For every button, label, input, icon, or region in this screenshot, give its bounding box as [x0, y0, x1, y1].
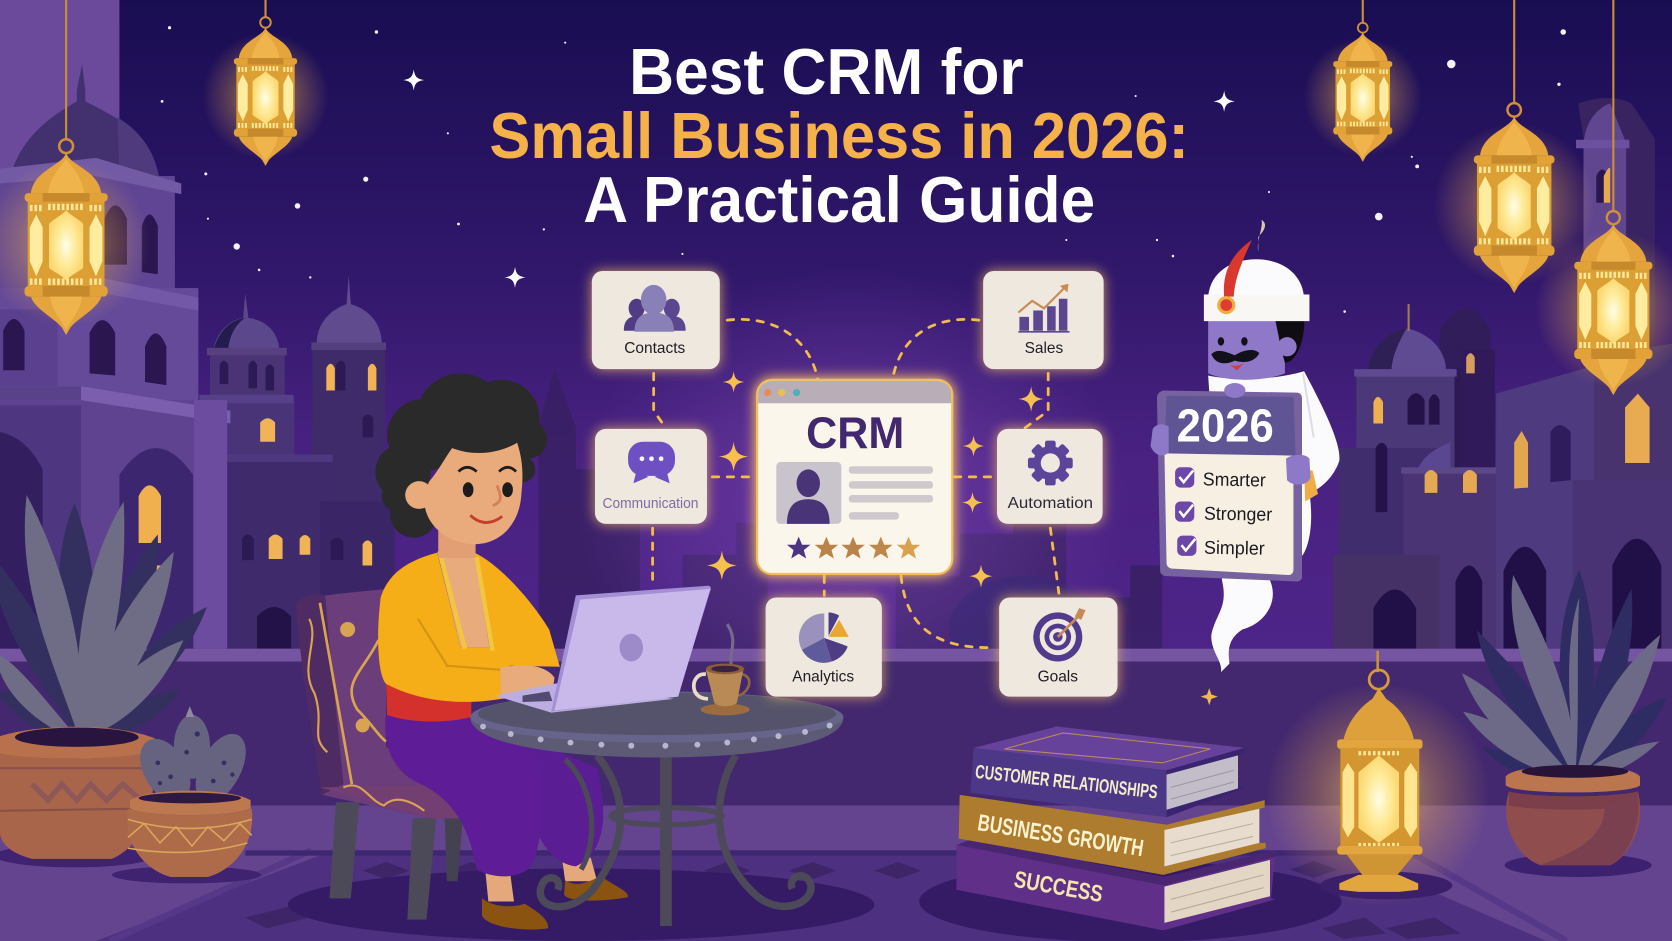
checklist: Smarter: Smarter [1203, 468, 1266, 491]
table legs [540, 753, 811, 926]
genie with 2026 sign [1151, 220, 1339, 705]
shirt [378, 553, 560, 702]
label: Sales: Sales [1025, 340, 1064, 357]
card: Automation [997, 429, 1103, 524]
icon: pie chart [799, 612, 849, 663]
book: Business Growth [959, 795, 1266, 875]
background: stars [161, 26, 1566, 313]
lantern: top left small [202, 0, 329, 166]
checklist: Smarter [1175, 467, 1266, 491]
label: Contacts: Contacts [624, 340, 685, 357]
person at laptop [296, 373, 628, 930]
lantern: floor [1266, 651, 1490, 907]
terrace wall and floor [0, 649, 1672, 941]
genie hands [1151, 383, 1311, 485]
spine label: CUSTOMER RELATIONSHIPS: CUSTOMER RELATIONSHIPS [974, 762, 1159, 804]
potted cactus [112, 706, 261, 883]
hands [500, 665, 554, 699]
checklist: Simpler [1177, 536, 1265, 559]
patterned rug [96, 850, 1566, 941]
background: night sky [0, 0, 1672, 661]
neck [438, 528, 476, 558]
laptop [495, 586, 711, 713]
checklist: Stronger [1175, 501, 1272, 525]
lantern: top right small [1304, 0, 1422, 162]
spine label: SUCCESS: SUCCESS [1012, 866, 1105, 907]
card: Contacts [592, 271, 720, 369]
card: Communication [595, 429, 707, 524]
chair [296, 589, 463, 920]
spine label: BUSINESS GROWTH: BUSINESS GROWTH [976, 809, 1145, 861]
card: Sales [983, 271, 1104, 369]
potted plant: left [0, 495, 207, 867]
heading: CRM: CRM [806, 408, 904, 458]
title: Small Business in 2026: [489, 99, 1189, 172]
profile photo [776, 462, 841, 524]
trousers [385, 715, 541, 876]
sign board [1157, 390, 1302, 581]
profile text lines [849, 466, 933, 520]
book: Success [956, 840, 1275, 930]
potted plant: right [1462, 570, 1667, 877]
background: right palace [1333, 98, 1672, 651]
background: left palace [0, 0, 395, 656]
genie head [1208, 320, 1285, 380]
card: central CRM window [755, 378, 954, 576]
background: faint central skyline [538, 368, 1162, 651]
label: Goals: Goals [1038, 669, 1078, 686]
stacked books [956, 727, 1275, 930]
mid towers [199, 275, 395, 653]
book: Customer Relationships [970, 727, 1244, 817]
icon: sales chart [1018, 284, 1070, 332]
year: 2026 [1177, 400, 1274, 452]
coffee cup [694, 624, 750, 715]
genie body and tail [1208, 371, 1339, 672]
table with laptop and cup [470, 586, 843, 926]
label: Automation: Automation [1008, 495, 1093, 512]
label: Communication: Communication [602, 496, 698, 512]
gold sparkles [707, 371, 1044, 588]
checklist: Stronger: Stronger [1204, 503, 1272, 525]
icon: contacts group [624, 285, 686, 332]
rating stars [787, 537, 920, 559]
icon: gear [1028, 441, 1073, 485]
turban [1204, 220, 1309, 321]
card: Analytics [766, 597, 882, 697]
table top [470, 717, 843, 757]
lantern: far right [1535, 0, 1672, 395]
icon: chat bubble [628, 442, 675, 483]
near foot [485, 870, 514, 902]
checklist: Simpler: Simpler [1204, 537, 1265, 559]
head [424, 443, 522, 544]
right hand cuff [1304, 469, 1318, 501]
lantern: top left large [0, 0, 149, 335]
sparkle under tail [1201, 688, 1218, 705]
CRM network connectors [653, 319, 1059, 648]
title: A Practical Guide [583, 163, 1095, 236]
card: Goals [999, 597, 1118, 697]
title: Best CRM for [629, 35, 1024, 108]
far leg and foot [562, 858, 597, 881]
lantern: right large [1434, 0, 1595, 293]
title [489, 35, 1189, 236]
main walls [0, 176, 175, 293]
label: Analytics: Analytics [792, 669, 854, 686]
sash [386, 683, 471, 722]
icon: target [1033, 608, 1086, 661]
curly hair [375, 373, 547, 538]
